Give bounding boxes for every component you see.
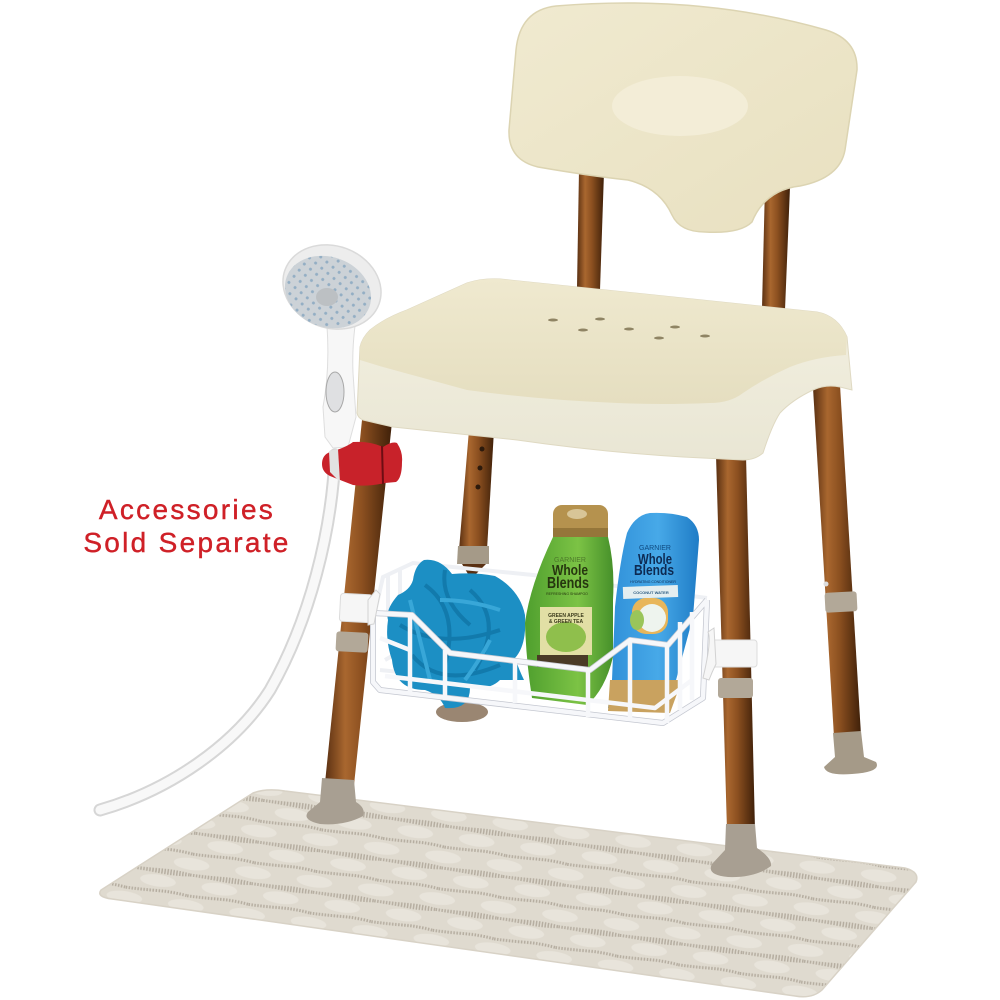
caption: accessories sold separate: Accessories [99,494,275,525]
blue conditioner bottle: Blends [634,562,674,579]
blue conditioner bottle [608,513,699,713]
green shampoo bottle: GREEN APPLE [548,613,584,619]
green shampoo bottle: REFRESHING SHAMPOO [546,592,588,596]
bath mat [100,790,917,997]
backrest posts [577,170,790,310]
blue conditioner bottle: GARNIER [639,545,671,552]
green shampoo bottle [525,505,613,705]
wire basket front [373,600,707,723]
seat [357,279,852,460]
wire basket back rails [375,563,707,675]
caption: accessories sold separate [83,494,291,558]
front right leg [711,455,771,877]
front left leg [306,420,392,824]
basket brackets [368,590,716,680]
backrest [509,3,857,232]
green shampoo bottle: GARNIER [554,557,586,564]
blue conditioner bottle: Whole [638,551,672,568]
green shampoo bottle: & GREEN TEA [549,619,583,625]
hose [100,455,335,810]
red holder clip [322,442,402,486]
back foot disc in basket [436,702,488,722]
caption: accessories sold separate: Sold Separate [83,527,291,558]
green shampoo bottle: Blends [547,575,589,592]
blue conditioner bottle: HYDRATING CONDITIONER [630,580,676,584]
back right leg [813,385,877,774]
loofah sponge [387,560,525,708]
shower head [271,231,393,448]
green shampoo bottle: Whole [552,562,588,579]
back left leg [457,430,494,574]
blue conditioner bottle: COCONUT WATER [633,590,669,595]
